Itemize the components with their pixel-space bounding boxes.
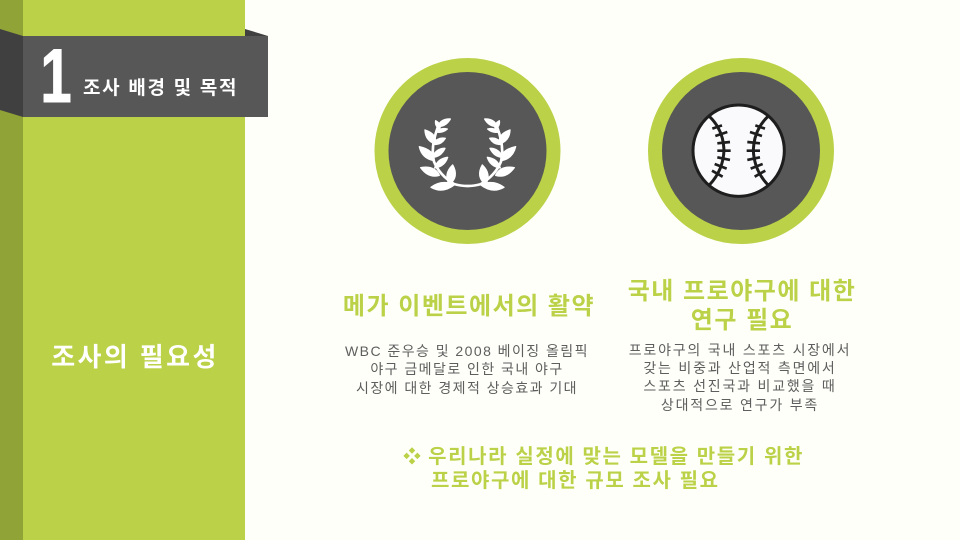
- text: mega event description: 시장에 대한 경제적 상승효과 기대: [356, 380, 578, 396]
- text: mega event description: 야구 금메달로 인한 국내 야구: [370, 361, 564, 377]
- text: mega event description: [345, 343, 589, 396]
- conclusion callout: 프로야구에 대한 규모 조사 필요: [431, 470, 720, 492]
- sidebar heading: 조사의 필요성: [51, 342, 219, 372]
- text: pro baseball description: 상대적으로 연구가 부족: [661, 397, 819, 413]
- conclusion callout: ❖ 우리나라 실정에 맞는 모델을 만들기 위한: [403, 446, 804, 468]
- heading: mega event: 메가 이벤트에서의 활약: [343, 293, 595, 320]
- section number: 1: [40, 34, 72, 119]
- heading: pro baseball research: [628, 278, 856, 334]
- heading: pro baseball research: 국내 프로야구에 대한: [628, 278, 856, 305]
- text: pro baseball description: 스포츠 선진국과 비교했을 때: [643, 378, 837, 394]
- section title: 조사 배경 및 목적: [83, 78, 238, 99]
- text: pro baseball description: 갖는 비중과 산업적 측면에서: [643, 360, 837, 376]
- text: mega event description: WBC 준우승 및 2008 베이징 올림픽: [345, 343, 589, 359]
- text: pro baseball description: 프로야구의 국내 스포츠 시장에서: [629, 342, 851, 358]
- conclusion callout: [403, 446, 804, 492]
- heading: pro baseball research: 연구 필요: [691, 307, 793, 334]
- text: pro baseball description: [629, 342, 851, 413]
